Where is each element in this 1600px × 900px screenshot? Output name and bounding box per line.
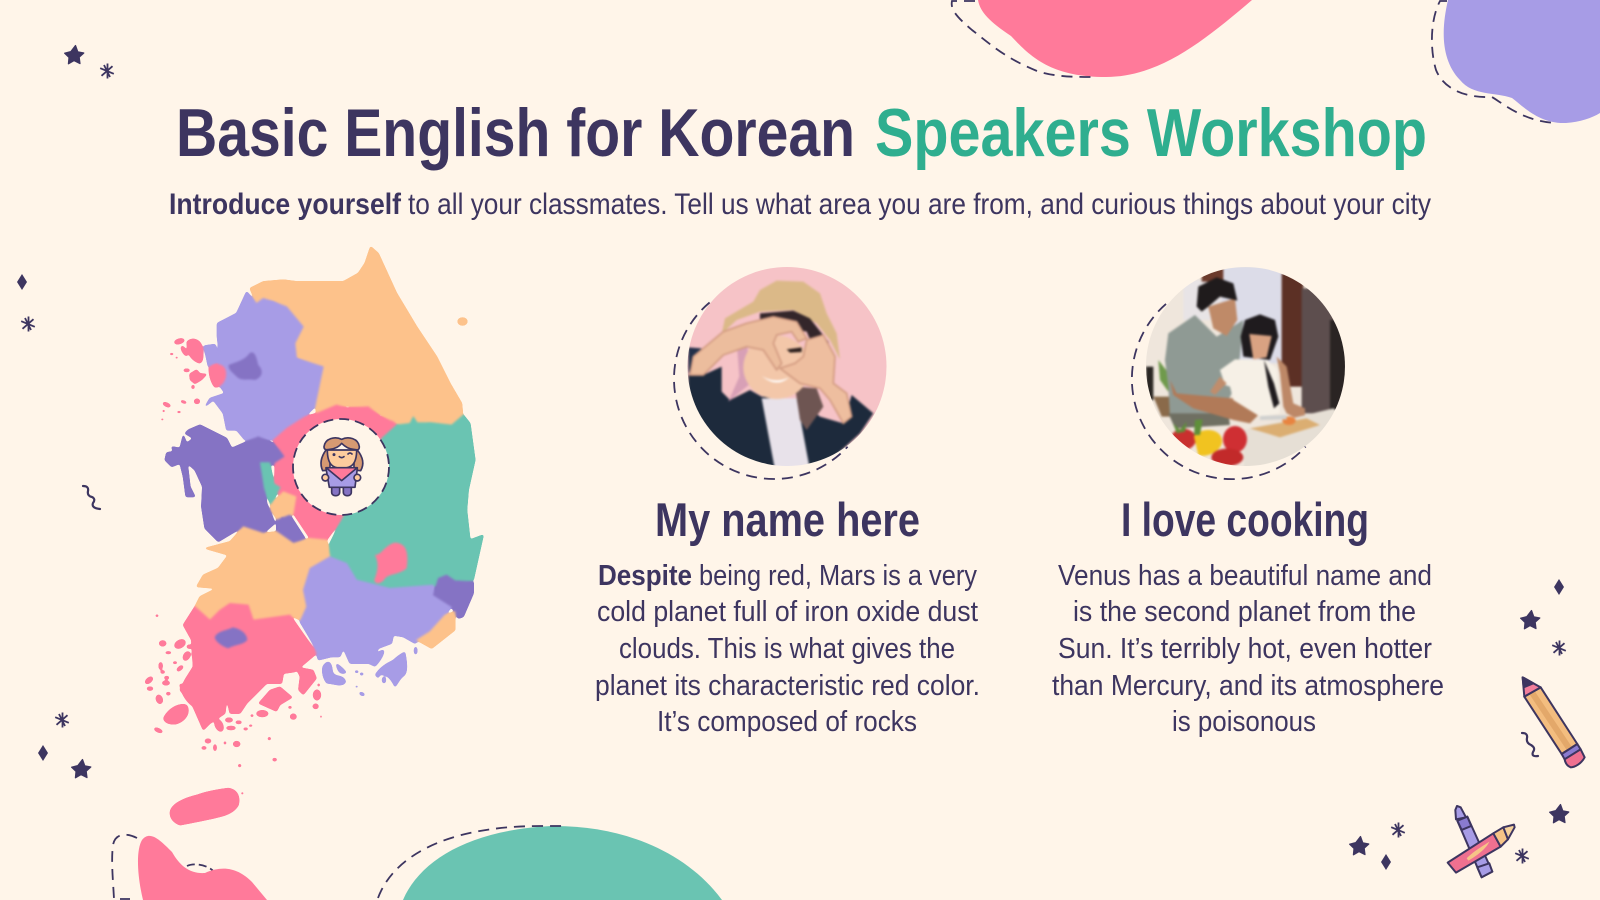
region: Sejong: [260, 462, 281, 505]
decoration: bottom sparkles: [1350, 822, 1529, 870]
body text: column two: Sun. It’s terribly hot, even hotter: [1058, 633, 1432, 665]
decoration: right sparkles: [1521, 579, 1566, 656]
photo: girl making heart with hands: [674, 260, 897, 479]
region: Gwangju: [215, 627, 247, 648]
region: Seoul: [229, 352, 262, 380]
title: [176, 95, 1427, 171]
photo: father and daughter cooking: [1132, 260, 1357, 479]
decoration: right squiggle: [1522, 733, 1538, 756]
body text: column two: is poisonous: [1172, 706, 1316, 738]
region: Daejeon: [271, 492, 296, 522]
region: Gyeonggi: [205, 292, 323, 440]
body text: column one: planet its characteristic red color.: [595, 670, 980, 702]
decoration: top-left sparkles: [65, 46, 114, 78]
body text: column one: Despite: [598, 560, 692, 592]
region: Chungbuk: [273, 405, 397, 540]
body text: column one: clouds. This is what gives the: [619, 633, 955, 665]
body text: column one: being red, Mars is a very: [699, 560, 977, 592]
heading: i love cooking: I love cooking: [1121, 493, 1369, 546]
heading: my name here: My name here: [655, 493, 920, 546]
region: Jeonbuk: [195, 527, 330, 620]
title: Speakers Workshop: [875, 95, 1427, 171]
region: Incheon and islands: [161, 337, 226, 420]
map of South Korea: [144, 247, 483, 825]
title: Basic English for Korean: [176, 95, 855, 171]
dashed ring: [1132, 304, 1306, 479]
blob: pink bottom left: [112, 835, 267, 900]
body text: column two: is the second planet from the: [1073, 596, 1416, 628]
region: Busan: [417, 612, 455, 648]
region: Jeonnam: [180, 603, 317, 730]
map badge: girl holding envelope: [293, 419, 389, 515]
decoration: left squiggle: [83, 486, 100, 509]
decoration: bottom-right star: [1550, 804, 1569, 823]
icon: pencil: [1523, 677, 1585, 767]
subtitle: Introduce yourself: [169, 188, 402, 221]
island: Ulleungdo: [458, 318, 468, 326]
decoration: bottom-left sparkles: [38, 712, 91, 778]
subtitle: to all your classmates. Tell us what area you are from, and curious things about your city: [408, 188, 1431, 221]
blob: teal bottom: [378, 826, 722, 900]
icon: girl: [321, 438, 363, 496]
body text: column one: cold planet full of iron oxide dust: [597, 596, 978, 628]
decoration: left sparkles: [17, 274, 35, 332]
region: Gyeongbuk: [330, 415, 483, 590]
region: Chungbuk south: [277, 515, 305, 543]
region: Gyeongnam: [300, 557, 452, 663]
islands: south-west coast: [144, 614, 322, 795]
body text: column one: It’s composed of rocks: [657, 706, 917, 738]
icon: crossed crayons: [1448, 806, 1515, 877]
islands: south coast east: [322, 647, 417, 697]
body text: column two: [1052, 560, 1444, 738]
blob: lavender top right: [1432, 0, 1600, 123]
dashed ring: [674, 302, 848, 479]
region: Ulsan: [433, 575, 473, 618]
body text: column two: than Mercury, and its atmosphere: [1052, 670, 1444, 702]
body text: column one: [595, 560, 980, 738]
region: Gyeonggi west strip: [204, 344, 223, 367]
blob: pink top: [952, 0, 1252, 77]
region: Chungnam: [165, 425, 285, 542]
body text: column two: Venus has a beautiful name and: [1058, 560, 1432, 592]
region: Jeju: [170, 788, 239, 825]
region: Gangwon: [250, 247, 463, 427]
region: Daegu: [374, 543, 407, 583]
